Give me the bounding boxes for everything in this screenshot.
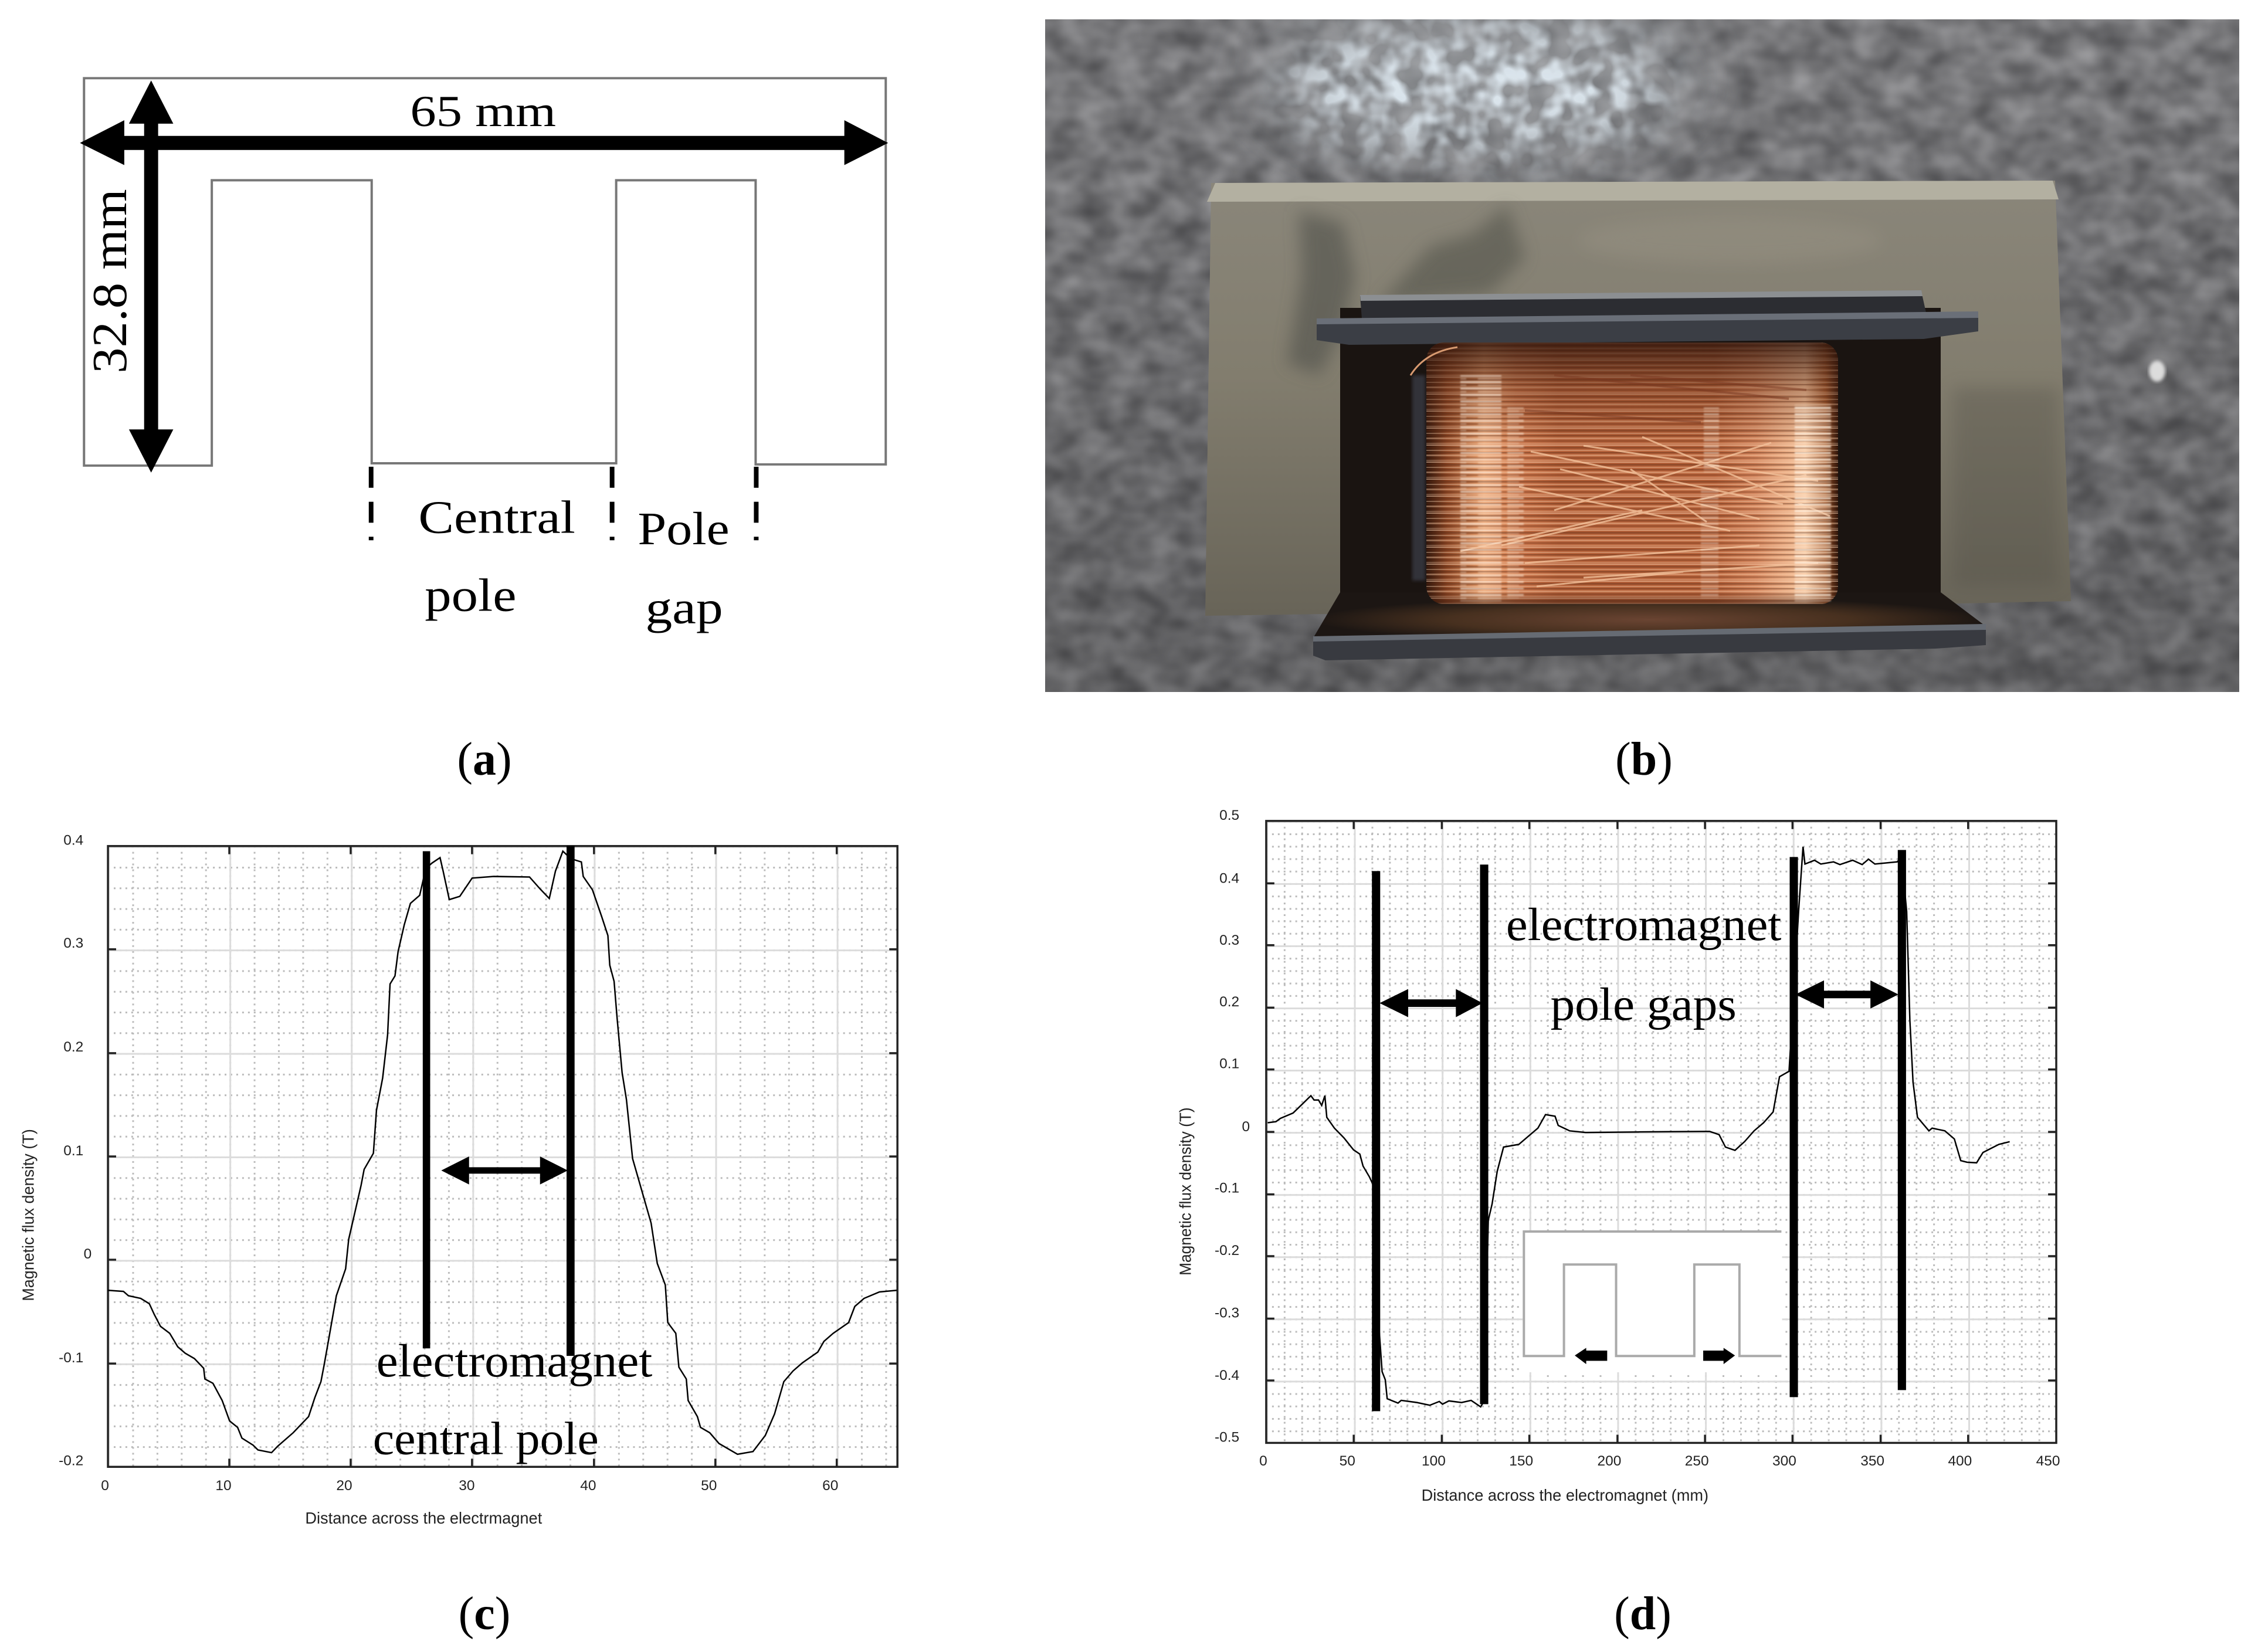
- vertical arrow: 32.8 mm height: [129, 80, 173, 473]
- label: Central pole: pole: [425, 570, 516, 622]
- annotation: electromagnet pole gaps: [1506, 899, 1781, 1030]
- x axis tick labels: 30: [459, 1478, 475, 1494]
- caption d: (d): [1614, 1588, 1672, 1640]
- y axis tick labels: -0.1: [1215, 1181, 1239, 1196]
- y axis tick labels: [59, 833, 91, 1468]
- flux density curve: [1267, 847, 2010, 1407]
- dashed pole markers: [371, 467, 756, 540]
- x axis tick labels: 300: [1772, 1453, 1796, 1469]
- x axis tick labels: 0: [1259, 1453, 1267, 1469]
- horizontal arrow: 65 mm width: [80, 120, 888, 165]
- inset: electromagnet sketch with arrows: [1523, 1230, 1782, 1372]
- y axis tick labels: 0: [84, 1246, 91, 1262]
- annotation: electromagnet central pole: central pole: [373, 1413, 599, 1464]
- panel d: pole gap flux density chart: [1177, 808, 2060, 1504]
- x axis tick labels: 350: [1860, 1453, 1884, 1469]
- bobbin floor: [1313, 592, 1986, 638]
- plot frame and tick marks: [108, 846, 897, 1467]
- y axis tick labels: 0.1: [63, 1143, 83, 1159]
- x axis tick labels: 60: [822, 1478, 838, 1494]
- textured grey background: [1045, 19, 2239, 692]
- x axis tick labels: 100: [1422, 1453, 1446, 1469]
- annotation: electromagnet pole gaps: electromagnet: [1506, 899, 1781, 951]
- bobbin back flange: [1360, 290, 1926, 318]
- x axis tick labels: [101, 1478, 838, 1494]
- x axis tick labels: 20: [336, 1478, 352, 1494]
- annotation: electromagnet central pole: electromagnet: [377, 1335, 652, 1387]
- metal core: [1205, 181, 2071, 616]
- double arrow: central pole width: [441, 1156, 568, 1185]
- panel a: electromagnet dimension diagram: [80, 78, 888, 634]
- label: Central pole: Central: [418, 491, 575, 543]
- panel c: central pole flux density chart: [19, 833, 897, 1527]
- pole gap boundary bars: [1372, 850, 1906, 1411]
- label: Pole gap: [638, 503, 730, 634]
- annotation: electromagnet pole gaps: pole gaps: [1550, 979, 1737, 1030]
- y axis tick labels: 0.3: [63, 935, 83, 951]
- y axis tick labels: -0.4: [1215, 1368, 1239, 1383]
- y axis title: Magnetic flux density (T): [19, 1129, 38, 1301]
- x axis tick labels: 50: [1340, 1453, 1355, 1469]
- y axis tick labels: 0.1: [1219, 1056, 1239, 1072]
- x axis tick labels: 400: [1948, 1453, 1972, 1469]
- flux density curve: [108, 851, 897, 1454]
- caption b: (b): [1615, 734, 1673, 785]
- x axis tick labels: 0: [101, 1478, 109, 1494]
- x axis tick labels: 150: [1509, 1453, 1533, 1469]
- x axis tick labels: [1259, 1453, 2060, 1469]
- y axis tick labels: 0.2: [1219, 994, 1239, 1010]
- x axis tick labels: 450: [2036, 1453, 2060, 1469]
- y axis title: Magnetic flux density (T): [1177, 1107, 1195, 1276]
- caption c: (c): [459, 1588, 510, 1640]
- plot grid: [108, 846, 897, 1467]
- label: Pole gap: gap: [645, 582, 723, 634]
- x axis title: Distance across the electrmagnet: [305, 1509, 543, 1527]
- annotation: electromagnet central pole: [373, 1335, 652, 1464]
- y axis tick labels: 0: [1242, 1119, 1250, 1135]
- x axis tick labels: 10: [215, 1478, 232, 1494]
- copper coil: [1411, 342, 1838, 604]
- panel b: photograph of wound electromagnet: [1045, 6, 2239, 692]
- x axis tick labels: 50: [701, 1478, 717, 1494]
- y axis tick labels: 0.4: [63, 833, 83, 849]
- label: Central pole: [418, 491, 575, 622]
- label: Pole gap: Pole: [638, 503, 730, 555]
- y axis tick labels: [1215, 808, 1250, 1445]
- y axis tick labels: -0.1: [59, 1350, 83, 1366]
- bobbin bottom flange: [1313, 624, 1986, 660]
- E-core outline: [84, 78, 886, 466]
- y axis tick labels: 0.2: [63, 1039, 83, 1055]
- y axis tick labels: -0.3: [1215, 1305, 1239, 1321]
- y axis tick labels: 0.4: [1219, 870, 1239, 886]
- caption a: (a): [457, 734, 512, 785]
- light speck on background: [2149, 361, 2165, 382]
- coil shadow reflection: [1412, 375, 1425, 581]
- label: 65 mm: 65 mm: [410, 87, 556, 136]
- dark window: [1340, 308, 1941, 607]
- bobbin top flange: [1317, 311, 1978, 345]
- x axis tick labels: 200: [1598, 1453, 1621, 1469]
- y axis tick labels: 0.5: [1219, 808, 1239, 823]
- x axis title: Distance across the electromagnet (mm): [1422, 1486, 1708, 1504]
- x axis tick labels: 40: [580, 1478, 596, 1494]
- label: 32.8 mm: 32.8 mm: [83, 189, 137, 374]
- y axis tick labels: -0.2: [1215, 1243, 1239, 1258]
- y axis tick labels: -0.2: [59, 1453, 83, 1468]
- background light variation: [1045, 6, 2239, 692]
- plot grid: [1266, 821, 2056, 1443]
- plot frame and tick marks: [1266, 821, 2056, 1443]
- y axis tick labels: -0.5: [1215, 1429, 1239, 1445]
- central pole boundary bars: [423, 846, 575, 1356]
- y axis tick labels: 0.3: [1219, 932, 1239, 948]
- double arrows: pole gap widths: [1379, 981, 1898, 1017]
- x axis tick labels: 250: [1685, 1453, 1709, 1469]
